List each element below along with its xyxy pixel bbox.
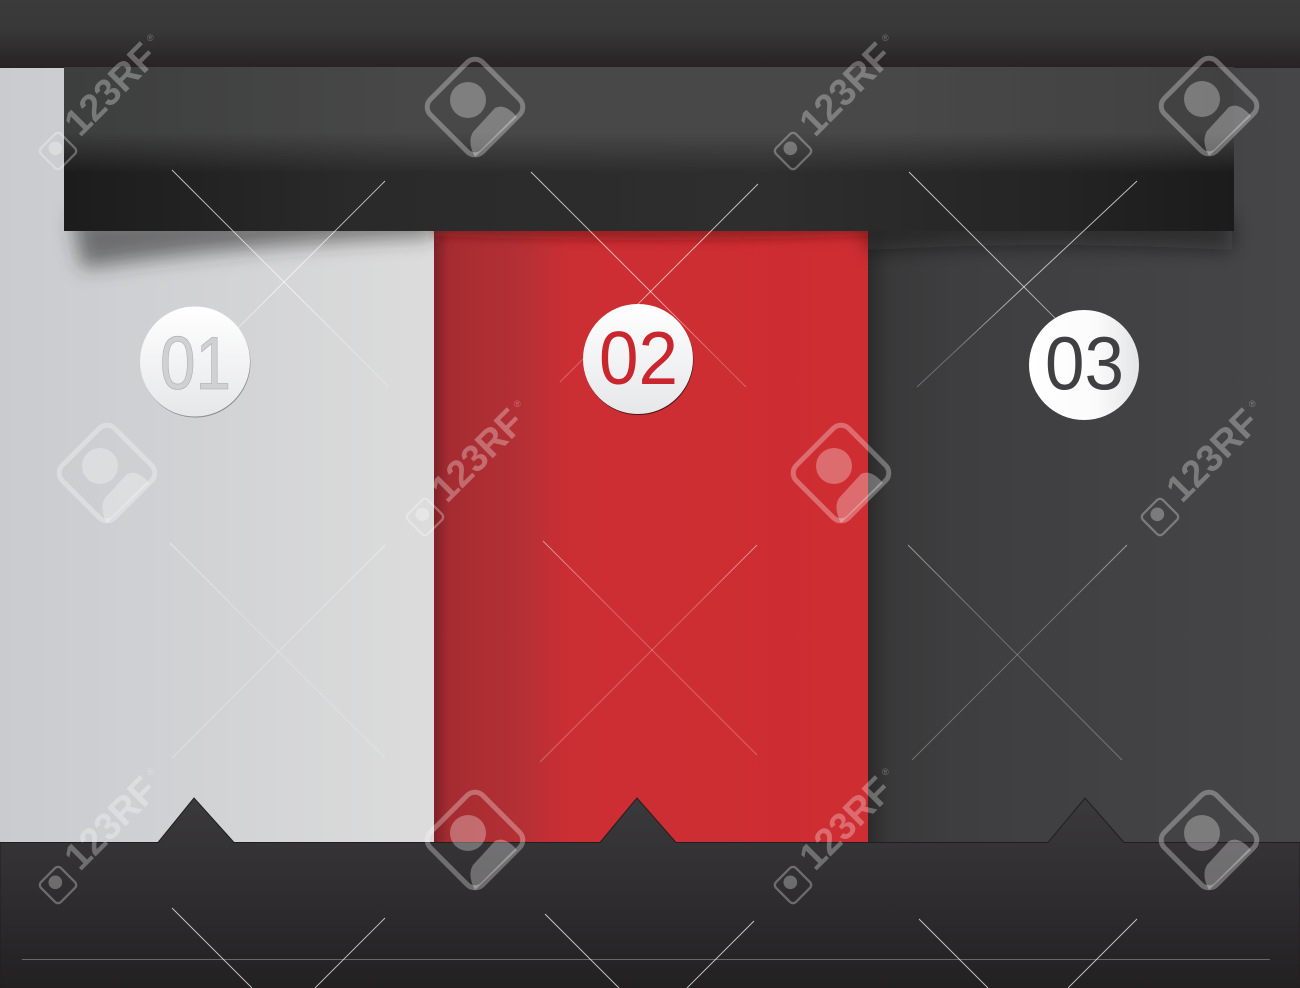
- watermark logo 2: 123RF: [792, 35, 901, 144]
- icon: watermark camera 4: [789, 421, 893, 525]
- watermark logo 2: [773, 33, 901, 171]
- watermark logo 3: ®: [514, 399, 521, 409]
- icon: watermark camera 2: [1157, 54, 1261, 158]
- icon: watermark camera 1: [423, 55, 527, 159]
- watermark logo 4: [1140, 399, 1268, 537]
- icon: watermark camera 5: [423, 788, 527, 892]
- watermark logo 1: 123RF: [57, 35, 166, 144]
- ribbon cast shadow: [72, 215, 1232, 268]
- watermark logo 5: ®: [147, 767, 154, 777]
- badge 03: [1029, 310, 1139, 420]
- watermark logo 4: 123RF: [1159, 401, 1268, 510]
- watermark logo 4: ®: [1249, 399, 1256, 409]
- badge 02: [583, 304, 694, 415]
- watermark logo 2: ®: [882, 33, 889, 43]
- top dark bar: [0, 0, 1300, 68]
- watermark logo 3: 123RF: [424, 401, 533, 510]
- panel: red column 02: [434, 68, 868, 843]
- watermark logo 5: [38, 767, 166, 905]
- badge 01: [140, 306, 250, 418]
- watermark logo 1: ®: [147, 33, 154, 43]
- badge 01: 01: [160, 321, 231, 405]
- watermark logo 6: 123RF: [792, 769, 901, 878]
- bottom dark band with notches: [0, 798, 1300, 988]
- panel: light column 01: [0, 68, 434, 843]
- badge 02: 02: [599, 316, 678, 400]
- watermark logo 5: 123RF: [57, 769, 166, 878]
- watermark logo 3: [405, 399, 533, 537]
- ribbon banner: [64, 67, 1234, 231]
- watermark logo 6: ®: [882, 767, 889, 777]
- panel: dark column 03: [868, 68, 1300, 843]
- badge 03: 03: [1045, 322, 1124, 406]
- watermark logo 6: [773, 767, 901, 905]
- icon: watermark camera 6: [1157, 788, 1261, 892]
- decorative cross lines: [22, 170, 1270, 988]
- watermark logo 1: [38, 33, 166, 171]
- icon: watermark camera 3: [55, 421, 159, 525]
- watermark: large camera icons: [55, 54, 1261, 892]
